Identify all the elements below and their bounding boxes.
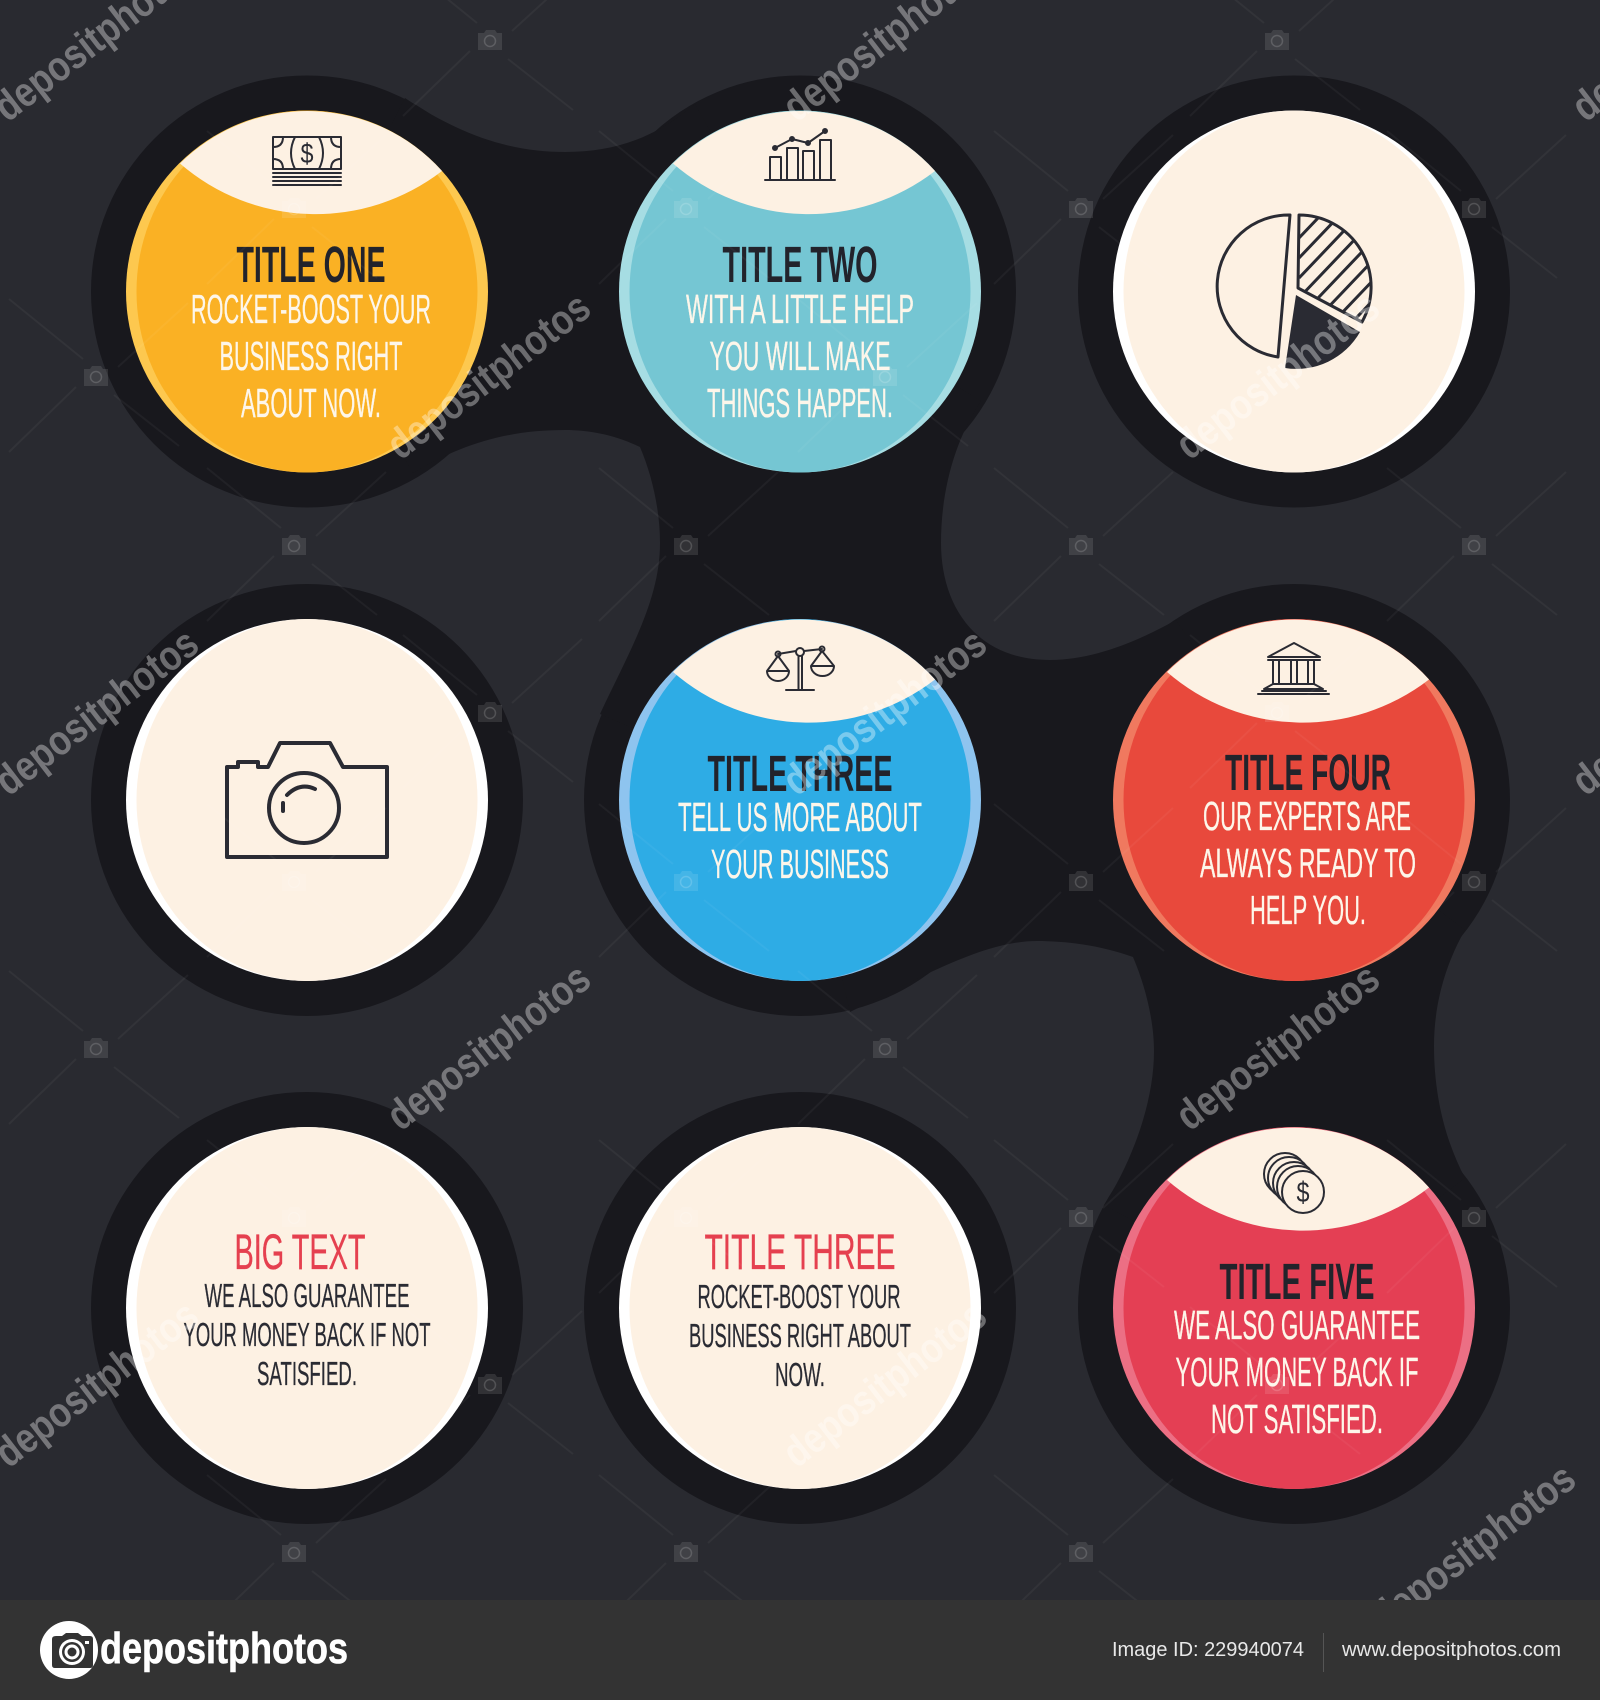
- website: www.depositphotos.com: [1341, 1639, 1561, 1661]
- text block: ALWAYS READY TO: [1200, 840, 1416, 886]
- icon: bank: [1258, 643, 1329, 694]
- image id: Image ID: 229940074: [1112, 1639, 1304, 1661]
- icon: pie chart: [1216, 214, 1373, 369]
- heading: TITLE THREE: [704, 1224, 896, 1280]
- heading: TITLE FOUR: [1225, 744, 1391, 801]
- watermark text: depositphotos: [773, 1291, 995, 1476]
- footer bar: [0, 1600, 1600, 1700]
- heading: TITLE TWO: [722, 236, 878, 293]
- panel: title three cream: [619, 1127, 981, 1489]
- watermark text: depositphotos: [773, 619, 995, 804]
- watermark text: depositphotos: [377, 954, 599, 1139]
- icon: bar chart: [765, 129, 835, 180]
- panel: title four: [1113, 619, 1475, 981]
- panel: camera: [126, 619, 488, 981]
- text block: WITH A LITTLE HELP: [686, 286, 914, 332]
- panel: title three blue: [619, 619, 981, 981]
- panel: pie chart: [1113, 110, 1475, 472]
- text block: YOUR BUSINESS: [711, 841, 889, 887]
- icon: coins: $: [1296, 1177, 1310, 1209]
- icon: footer logo: [40, 1621, 98, 1679]
- text block: NOT SATISFIED.: [1211, 1396, 1383, 1442]
- text block: [1174, 1302, 1420, 1442]
- panel: title one: [126, 110, 488, 472]
- text block: HELP YOU.: [1250, 887, 1366, 933]
- text block: YOUR MONEY BACK IF NOT: [184, 1316, 430, 1353]
- icon: camera: [227, 743, 387, 857]
- text block: ABOUT NOW.: [241, 380, 381, 426]
- heading: BIG TEXT: [234, 1224, 366, 1280]
- text block: [184, 1277, 430, 1392]
- text block: [689, 1278, 911, 1393]
- text block: ROCKET-BOOST YOUR: [191, 286, 431, 332]
- watermark text: depositphotos: [1166, 283, 1388, 468]
- watermark text: depositphotos: [377, 283, 599, 468]
- icon: coins: [1264, 1153, 1324, 1213]
- dark connector shape: [91, 76, 1510, 1524]
- text block: TELL US MORE ABOUT: [678, 794, 922, 840]
- icon: scales: [767, 646, 834, 690]
- text block: WE ALSO GUARANTEE: [204, 1277, 410, 1314]
- heading: TITLE ONE: [236, 236, 386, 293]
- watermark text: depositphotos: [1166, 954, 1388, 1139]
- text block: [678, 794, 922, 887]
- heading: TITLE FIVE: [1220, 1253, 1374, 1310]
- text block: THINGS HAPPEN.: [707, 380, 893, 426]
- icon: banknotes: [273, 137, 341, 185]
- panel: title five: [1113, 1127, 1475, 1489]
- text block: [686, 286, 914, 426]
- panel: big text: [126, 1127, 488, 1489]
- text block: BUSINESS RIGHT ABOUT: [689, 1317, 911, 1354]
- footer logotype: depositphotos: [100, 1624, 348, 1673]
- text block: NOW.: [775, 1356, 825, 1393]
- text block: [191, 286, 431, 426]
- text block: OUR EXPERTS ARE: [1203, 793, 1411, 839]
- text block: ROCKET-BOOST YOUR: [698, 1278, 900, 1315]
- icon: banknotes: $: [300, 138, 314, 169]
- text block: [1200, 793, 1416, 933]
- text block: YOU WILL MAKE: [710, 333, 890, 379]
- heading: TITLE THREE: [708, 745, 892, 802]
- text block: BUSINESS RIGHT: [220, 333, 402, 379]
- text block: SATISFIED.: [257, 1355, 357, 1392]
- panel: title two: [619, 110, 981, 472]
